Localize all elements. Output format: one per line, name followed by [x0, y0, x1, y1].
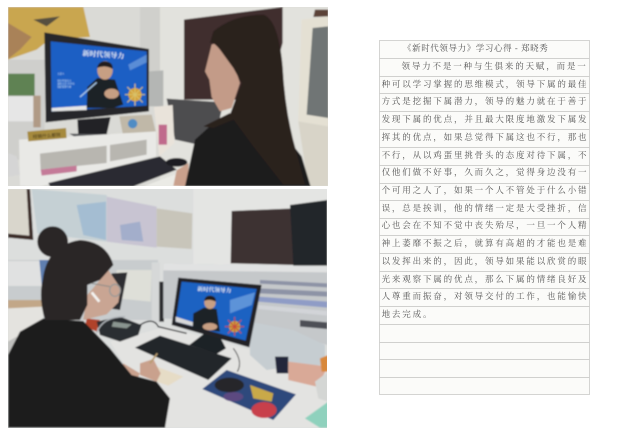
notes body text: 人尊重而振奋，对领导交付的工作，也能愉快 [382, 291, 588, 301]
notes body text: 地去完成。 [382, 309, 433, 319]
notes body text: 发现下属的优点，并且最大限度地激发下属发 [382, 114, 588, 124]
photo: woman with hair bun taking notes at office desk: 新时代领导力 [197, 284, 232, 295]
photo: woman with long hair watching lecture on monitor [8, 7, 328, 186]
notes body text: 方式是挖掘下属潜力，领导的魅力就在于善于 [382, 96, 588, 106]
photo: woman with long hair watching lecture on monitor: 新时代领导力 [82, 49, 125, 62]
photo: woman with long hair watching lecture on monitor: 组织管理专家 [57, 85, 72, 89]
notes body text: 误，总是挨训，他的情绪一定是大受挫折，信 [382, 203, 588, 213]
notes body text: 个可用之人了，如果一个人不管处于什么小错 [382, 185, 588, 195]
notes body text: 挥其的优点，如果总觉得下属这也不行，那也 [382, 132, 588, 142]
notes title: 《新时代领导力》学习心得 - 郑晓秀 [403, 43, 548, 53]
notes body text: 神上萎靡不振之后，就算有高超的才能也是难 [382, 238, 588, 248]
photo: woman with long hair watching lecture on monitor: 经销什么都效 [33, 132, 61, 141]
notes body text [382, 61, 588, 319]
notes body text: 不行，从以鸡蛋里挑骨头的态度对待下属，不 [382, 150, 588, 160]
notes body text: 仅他们做不好事，久而久之，觉得身边没有一 [382, 167, 588, 177]
photo: woman with long hair watching lecture on monitor: 主讲人 [57, 72, 65, 76]
photo: woman with long hair watching lecture on monitor: 新时代领导力 [57, 79, 72, 83]
notes body text: 心也会在不知不觉中丧失殆尽，一旦一个人精 [382, 220, 588, 230]
notes body text: 领导力不是一种与生俱来的天赋，而是一 [402, 61, 588, 71]
notes body text: 光来观察下属的优点，那么下属的情绪良好及 [382, 274, 588, 284]
panel: handwritten study notes on lined paper [379, 40, 590, 395]
photo: woman with hair bun taking notes at office desk [8, 189, 327, 428]
photo: woman with long hair watching lecture on monitor: 课程主讲 2020年 [57, 82, 75, 86]
notes body text: 以发挥出来的，因此，领导如果能以欣赏的眼 [382, 256, 588, 266]
notes body text: 种可以学习掌握的思维模式，领导下属的最佳 [382, 79, 588, 89]
